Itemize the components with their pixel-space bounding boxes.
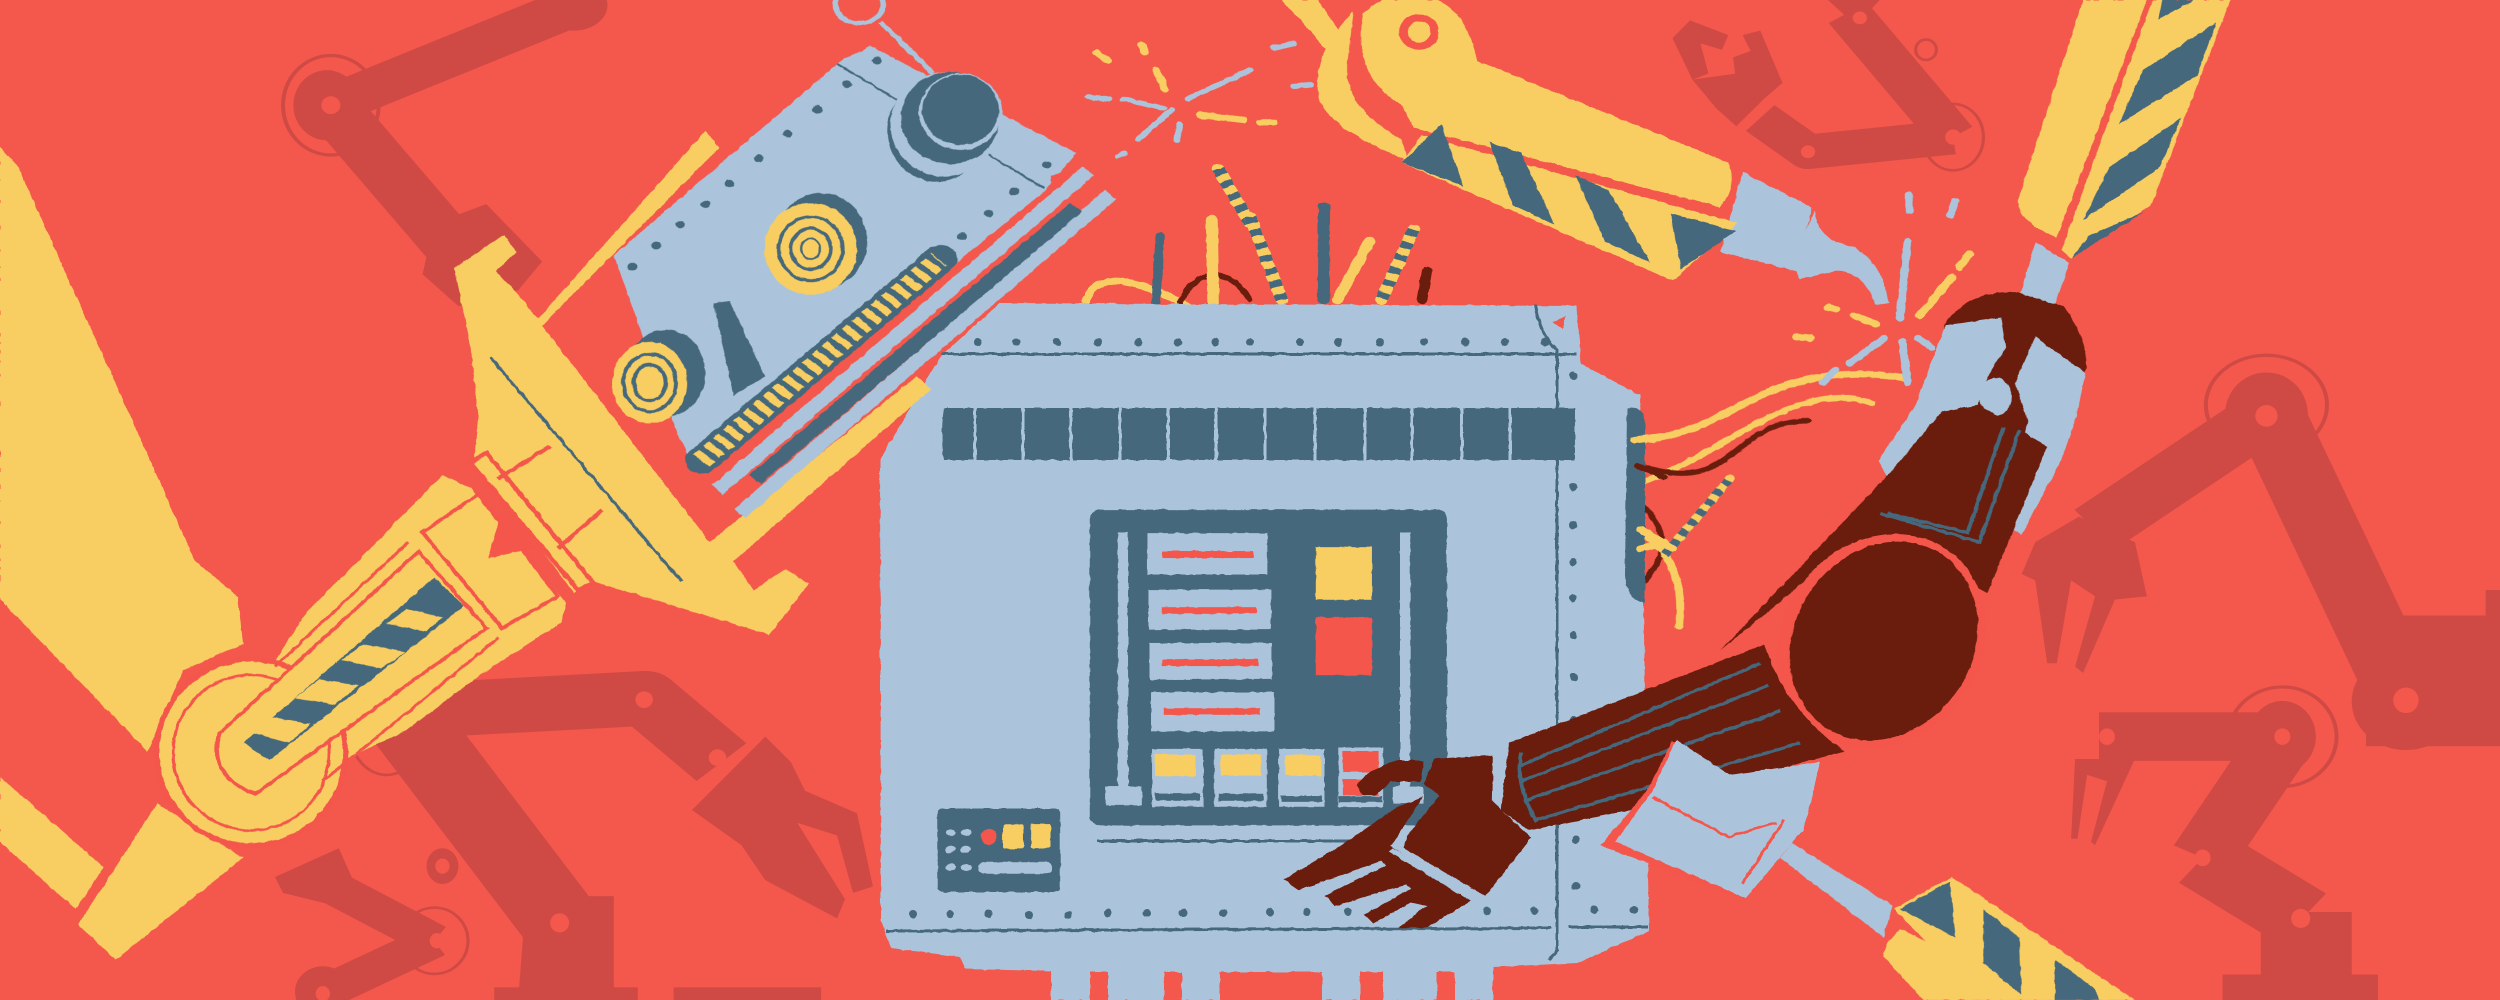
blue shaft [2007,242,2070,346]
forearm [1501,644,1844,830]
bottom right arm [1780,843,2135,1000]
nozzle [1720,172,1889,305]
palm [1404,755,1531,896]
wires on right of machine [1637,374,1904,626]
screen buttons [1152,747,1383,807]
shadow robot top left [283,0,607,306]
rivets [909,338,1638,919]
thumb [1356,760,1424,796]
forearm casing [239,475,566,772]
top centre arm [1282,0,1889,305]
arm yellow casing [2018,0,2147,237]
blue cuff [1601,741,1818,901]
top arm crescent [1317,11,1408,161]
shadow robots left [275,0,873,1000]
arm teal stripes [2071,0,2216,258]
side vent [1625,408,1645,603]
head rivets [627,57,1052,270]
sparks top centre right [1274,43,1310,86]
small control panel [938,809,1060,892]
yellow spark [1260,118,1274,127]
maroon robot arm [1501,292,2087,901]
shadow robot large right [2022,355,2500,750]
teal divider bar [942,406,1575,462]
fingers [1284,797,1471,928]
maroon hand [1284,755,1531,928]
shadow robot bottom centre [351,691,873,1000]
top arm lower band [1401,135,1738,281]
screw stripes [243,577,464,760]
yellow and red indicators [1316,547,1372,675]
bottom arm casing [1894,877,2135,1000]
mouth [702,258,941,460]
top arm hub [1399,14,1439,50]
head seam [837,64,1044,188]
bottom arm stripes [1900,881,2099,1000]
shadow robot bottom left [275,848,468,1000]
top arm yellow stub [1282,0,1339,48]
claw details [498,446,602,549]
yellow claw arm [0,131,931,960]
collar [423,494,558,628]
top right arm [2007,0,2231,346]
control screen [1090,510,1447,825]
top arm stripes [1401,124,1736,269]
claw body [454,131,931,635]
forearm ribs [1520,663,1800,823]
corner bolt mark [1553,316,1566,330]
bottom arm nozzle [1780,843,1893,938]
arm red outlines [275,542,498,781]
elbow [1750,516,2013,766]
lower yellow bar [0,777,104,909]
large yellow base [0,147,243,751]
claw red triangle [488,504,536,558]
head strips [717,169,1110,513]
upper arm teal details [1880,427,2019,542]
lower yellow wedge [78,804,243,960]
large eye [765,193,867,295]
joint [154,657,348,848]
machine seam lines [886,305,1648,960]
small eye [612,330,706,423]
screen rails [1105,532,1423,805]
sparks centre [1088,45,1250,156]
machine body [880,303,1649,1000]
antenna [835,0,933,73]
maroon rear gripper [1944,292,2087,446]
robot head [612,0,1110,513]
screen readouts [1147,533,1274,731]
shadow robot lower right [2071,687,2378,1000]
blue grippers [1878,318,2085,534]
upper arm [1720,405,2047,651]
wrist gap [1391,850,1475,901]
knob [887,72,1002,182]
welding sparks [1796,195,1970,383]
head plate [614,46,1076,473]
wire tangle over vent [1634,436,1673,549]
shadow robots right [1673,0,2500,1000]
top arm upper band [1361,0,1732,207]
shadow robot top [1673,0,1983,170]
nose [713,301,765,395]
wires on top of machine [1086,169,1427,306]
claw neck [470,453,594,590]
